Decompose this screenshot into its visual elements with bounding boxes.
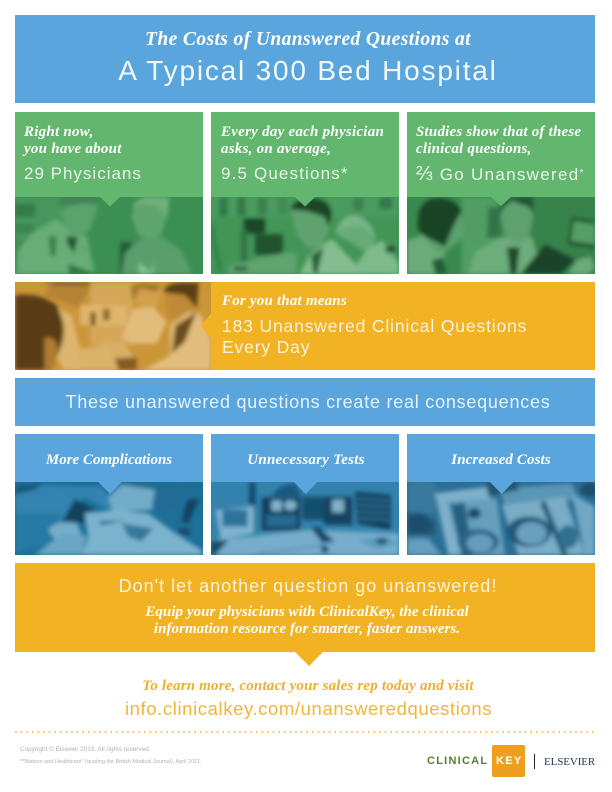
callout notch	[491, 197, 511, 206]
questions intro text: Every day each physician	[221, 124, 384, 140]
logo: Elsevier: ELSEVIER	[544, 756, 595, 768]
consequences banner	[15, 378, 595, 426]
questions figure: 9.5 Questions*	[221, 164, 349, 183]
consequences heading: These unanswered questions create real consequences	[65, 392, 551, 412]
questions intro text: asks, on average,	[221, 141, 331, 157]
footnote: **Watson and Healthcare" (quoting the British Medical Journal), April 2011.	[20, 759, 201, 765]
photo: hundred dollar bills	[407, 482, 595, 555]
physicians figure: 29 Physicians	[24, 164, 142, 183]
dotted divider	[15, 731, 594, 733]
means intro text: For you that means	[222, 293, 347, 309]
photo: imaging monitors	[211, 482, 399, 555]
physicians intro text	[22, 124, 122, 157]
photo: clinical team reviewing a chart	[15, 282, 211, 370]
panel: for you that means	[15, 282, 595, 370]
photo: doctors talking	[15, 197, 203, 274]
copyright: Copyright © Elsevier 2013. All rights reserved.	[20, 746, 150, 753]
physicians intro text: you have about	[24, 141, 122, 157]
costs heading: Increased Costs	[451, 452, 551, 468]
panel: unanswered share	[407, 112, 595, 274]
header panel	[15, 15, 595, 103]
panel: physicians	[15, 112, 203, 274]
panel: increased costs	[407, 434, 595, 555]
share intro text: clinical questions,	[416, 141, 531, 157]
photo: lab physicians	[211, 197, 399, 274]
callout notch	[294, 482, 317, 494]
share figure: ⅔ Go Unanswered*	[416, 163, 585, 185]
contact url: info.clinicalkey.com/unansweredquestions	[125, 698, 492, 719]
share intro text	[416, 124, 581, 157]
means figure: Every Day	[222, 337, 310, 357]
callout notch	[100, 197, 120, 207]
contact prompt: To learn more, contact your sales rep today and visit	[142, 678, 474, 694]
logo badge	[492, 745, 525, 777]
panel: unnecessary tests	[211, 434, 399, 555]
icon: down arrow	[295, 652, 323, 666]
header title: A Typical 300 Bed Hospital	[118, 55, 498, 86]
call to action heading: Don't let another question go unanswered!	[119, 576, 497, 596]
callout arrow	[201, 314, 211, 339]
means figure	[222, 316, 527, 357]
panel: questions	[211, 112, 399, 274]
physicians intro text: Right now,	[24, 124, 93, 140]
means figure: 183 Unanswered Clinical Questions	[222, 316, 527, 336]
panel: more complications	[15, 434, 203, 555]
callout notch	[490, 482, 513, 494]
photo: surgery	[15, 482, 203, 555]
call to action body: information resource for smarter, faster answers.	[154, 621, 460, 637]
logo divider	[534, 754, 535, 769]
call to action body: Equip your physicians with ClinicalKey, the clinical	[145, 604, 469, 620]
callout notch	[98, 482, 122, 494]
call to action body	[145, 604, 469, 637]
header subtitle: The Costs of Unanswered Questions at	[145, 29, 471, 50]
photo: doctors reading a scan	[407, 197, 595, 274]
logo word clinical: CLINICAL	[427, 755, 488, 767]
logo word key: KEY	[496, 755, 523, 767]
logo: ClinicalKey	[427, 745, 525, 777]
complications heading: More Complications	[46, 452, 172, 468]
callout notch	[295, 197, 315, 207]
panel: call to action	[15, 563, 595, 652]
questions intro text	[220, 124, 384, 157]
tests heading: Unnecessary Tests	[247, 452, 365, 468]
share intro text: Studies show that of these	[416, 124, 581, 140]
